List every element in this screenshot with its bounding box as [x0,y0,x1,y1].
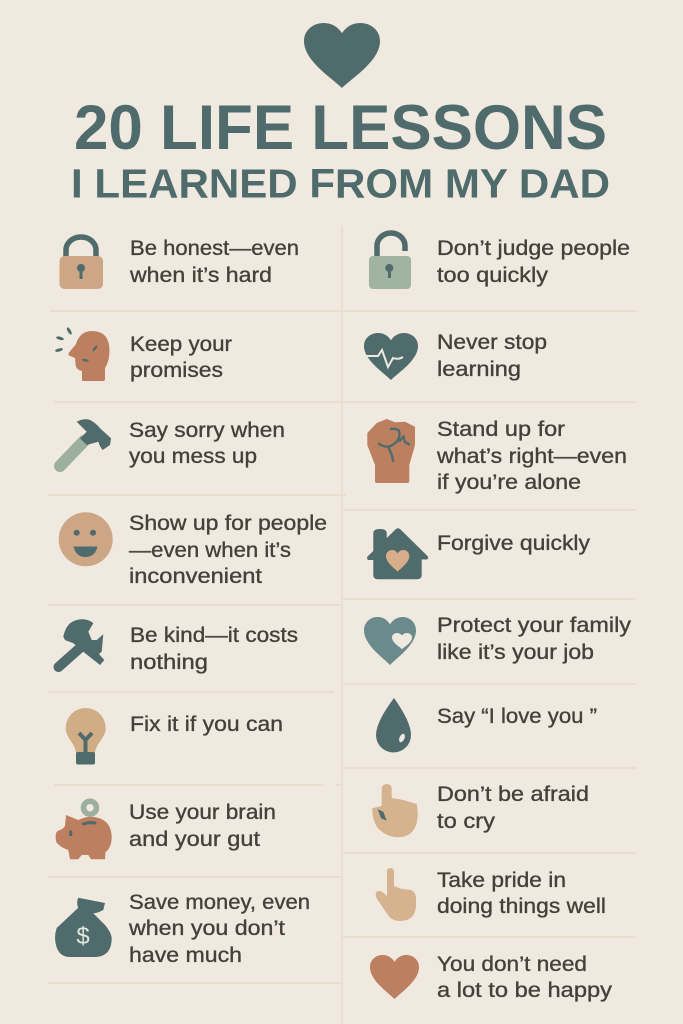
icon: heart with pulse line [364,333,418,380]
text: don't be afraid: to cry [437,810,496,833]
text: say sorry [129,419,285,468]
text: use your brain [129,801,276,851]
lesson 15 [372,783,589,837]
text: don't judge: too quickly [437,264,549,287]
text: use your brain: and your gut [129,828,260,851]
text: be honest: when it’s hard [129,264,272,287]
text: never stop: Never stop [437,331,547,354]
text: show up: inconvenient [129,565,262,588]
text: say sorry: you mess up [129,445,257,468]
icon: head in profile [55,327,110,381]
text: take pride: Take pride in [437,869,566,892]
text: don't be afraid [437,783,589,833]
icon: money bag: $ [76,923,90,950]
text: say i love you: Say “I love you ” [437,705,597,728]
text: show up: Show up for people [129,512,327,535]
icon: piggy bank with coin [56,801,112,859]
text: protect: Protect your family [437,614,632,637]
text: stand up: what’s right—even [436,445,627,468]
lesson 7 [56,801,276,859]
icon: house with heart [367,528,428,579]
icon: closed padlock [60,237,103,289]
text: save money: have much [129,944,242,967]
text: fix it: Fix it if you can [130,713,283,736]
text: forgive: Forgive quickly [437,532,591,555]
text: show up: —even when it’s [129,539,291,562]
title: 20 LIFE LESSONS [74,93,607,163]
lesson 11 [367,418,627,494]
text: save money: Save money, even [129,891,310,914]
text: never stop: learning [437,358,521,381]
title: I LEARNED FROM MY DAD [71,160,610,206]
lesson 4 [59,512,327,588]
text: be kind [130,624,298,674]
text: be honest [129,237,299,287]
text: you don't need [437,953,613,1002]
lesson 17 [370,953,613,1002]
lesson 9 [369,233,630,289]
text: use your brain: Use your brain [129,801,276,824]
icon: money bag [55,898,112,957]
text: be honest: Be honest—even [130,237,299,260]
icon: heart [370,955,419,999]
icon: light bulb [66,708,106,764]
lesson 8 [55,891,310,967]
text: you don't need: a lot to be happy [437,979,613,1002]
lesson 3 [60,419,285,468]
text: be kind: Be kind—it costs [130,624,298,647]
icon: hand pointing up [376,868,416,921]
lesson 2 [55,327,232,382]
text: don't be afraid: Don’t be afraid [437,783,589,806]
icon: heart with small heart [364,617,416,665]
icon: smiley face [59,512,113,566]
text: say sorry: Say sorry when [129,419,285,442]
text: keep your promises: promises [130,359,223,382]
text: take pride: doing things well [437,895,606,918]
text: don't judge: Don’t judge people [437,237,630,260]
text: show up [129,512,327,588]
icon: hammer and wrench [58,619,104,667]
text: never stop [437,331,547,381]
text: save money: when you don’t [128,917,285,940]
lesson 13 [364,614,632,665]
icon: open padlock [369,233,411,289]
text: stand up: Stand up for [437,418,565,441]
text: stand up [436,418,627,494]
lesson 1 [60,237,299,289]
lesson 14 [376,698,597,752]
text: don't judge [437,237,630,287]
lesson 6 [66,708,283,764]
text: protect [437,614,632,664]
text: protect: like it’s your job [437,641,594,664]
text: take pride [437,869,606,918]
icon: hand pointing up [372,784,418,837]
lesson 10 [364,331,547,381]
lesson 16 [376,868,606,921]
icon: top heart [304,23,380,88]
icon: water drop [376,698,411,752]
title [71,93,610,206]
text: save money [128,891,310,967]
lesson 5 [58,619,298,674]
text: stand up: if you’re alone [437,471,581,494]
icon: raised fist [367,419,415,483]
icon: hammer [60,419,111,466]
text: you don't need: You don’t need [437,953,587,976]
text: keep your promises: Keep your [130,333,232,356]
text: keep your promises [130,333,232,382]
text: be kind: nothing [130,651,208,674]
lesson 12 [367,528,591,579]
